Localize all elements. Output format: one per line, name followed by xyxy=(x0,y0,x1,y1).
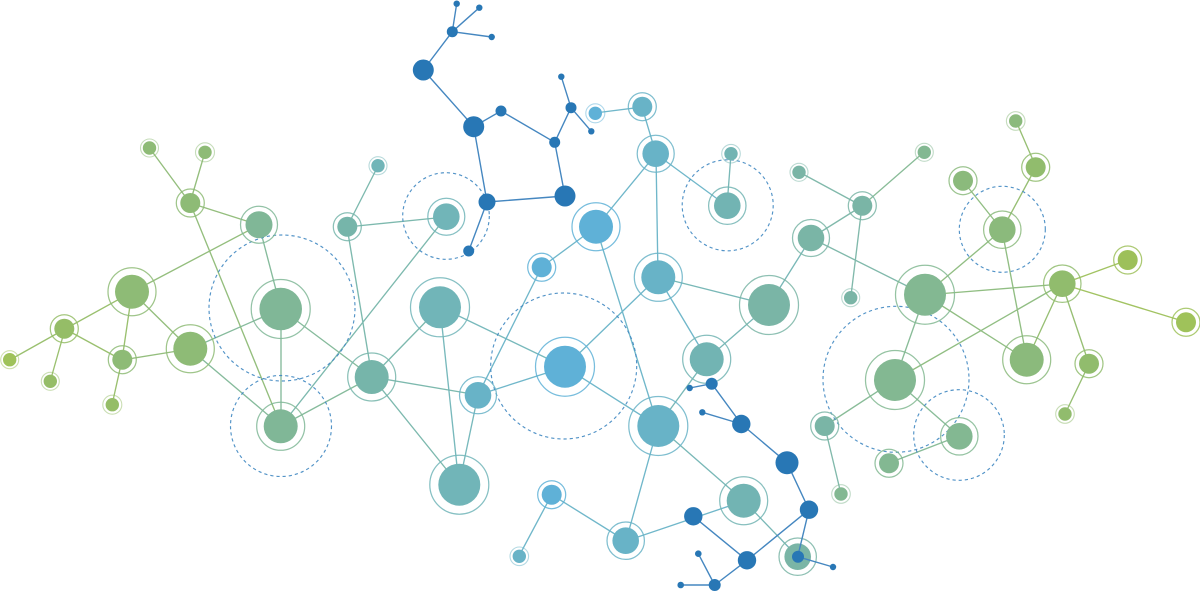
node: right hub upper xyxy=(896,265,954,324)
node: centre left large xyxy=(348,353,396,401)
node: left large lower xyxy=(166,325,214,373)
node: lower left hub xyxy=(257,402,305,450)
connecting lines: green and teal network xyxy=(10,107,1186,557)
node: bottom right teal xyxy=(720,477,768,525)
node: top centre xyxy=(628,93,656,121)
node: lower centre hub xyxy=(629,396,688,456)
node: blue small medium xyxy=(528,253,556,281)
node: left small xyxy=(41,372,59,390)
dark blue network: bottom xyxy=(677,378,836,591)
node: far left xyxy=(1,351,19,369)
node: right medium top xyxy=(848,192,876,220)
node: centre hub lower xyxy=(430,455,489,514)
node: centre hub upper xyxy=(410,278,470,337)
node: left large upper xyxy=(108,268,156,316)
node: top left medium xyxy=(176,189,204,217)
node: dashed centre left xyxy=(428,198,465,235)
node: centre right upper xyxy=(634,253,682,301)
node: right lower small xyxy=(832,485,850,503)
node: far right edge lime xyxy=(1172,308,1200,336)
node: far right top small xyxy=(1006,112,1025,130)
node: left medium xyxy=(50,315,78,343)
node: centre small xyxy=(460,377,496,414)
node: blue central hub xyxy=(536,337,594,396)
node: left small lower xyxy=(103,395,122,414)
node: bottom blue medium xyxy=(538,481,566,509)
node: bottom centre xyxy=(607,522,644,559)
node: centre right middle xyxy=(683,335,731,383)
node: right lower left xyxy=(811,412,839,440)
node: right dashed lower xyxy=(941,418,978,455)
node: left hub xyxy=(251,280,310,338)
node: top left small 2 xyxy=(196,143,214,162)
node: upper left xyxy=(240,206,278,243)
node: bottom blue small xyxy=(510,547,529,566)
node: right small top 2 xyxy=(915,143,933,161)
node: bottom green teal xyxy=(779,538,816,575)
node: small above dashed circle xyxy=(722,144,740,163)
node: top centre below xyxy=(637,135,674,172)
node: inside dashed circle xyxy=(709,187,746,224)
node: right upper xyxy=(792,220,830,256)
node: centre left small xyxy=(369,157,387,175)
node: far right large xyxy=(1003,336,1051,384)
node: left medium centre xyxy=(108,346,136,374)
node: far right lime xyxy=(1114,246,1142,274)
node: top left small xyxy=(140,139,158,157)
node: blue top small xyxy=(586,104,605,123)
node: centre right hub xyxy=(740,276,798,334)
node: right small top xyxy=(790,163,808,181)
node: right lower medium xyxy=(875,449,903,477)
dashed circles xyxy=(209,160,1045,480)
node: far right upper left xyxy=(949,167,977,195)
node: centre left medium xyxy=(333,213,361,241)
node: right hub lower xyxy=(866,350,924,410)
node: far right lower xyxy=(1075,350,1103,378)
node: dashed far right xyxy=(984,211,1021,248)
node: far right lower small xyxy=(1056,405,1074,423)
node: far right upper xyxy=(1022,153,1050,181)
node: right small middle xyxy=(842,289,860,307)
node: blue upper xyxy=(572,203,620,251)
dark blue network: top xyxy=(413,0,594,256)
node: far right junction xyxy=(1044,265,1081,302)
